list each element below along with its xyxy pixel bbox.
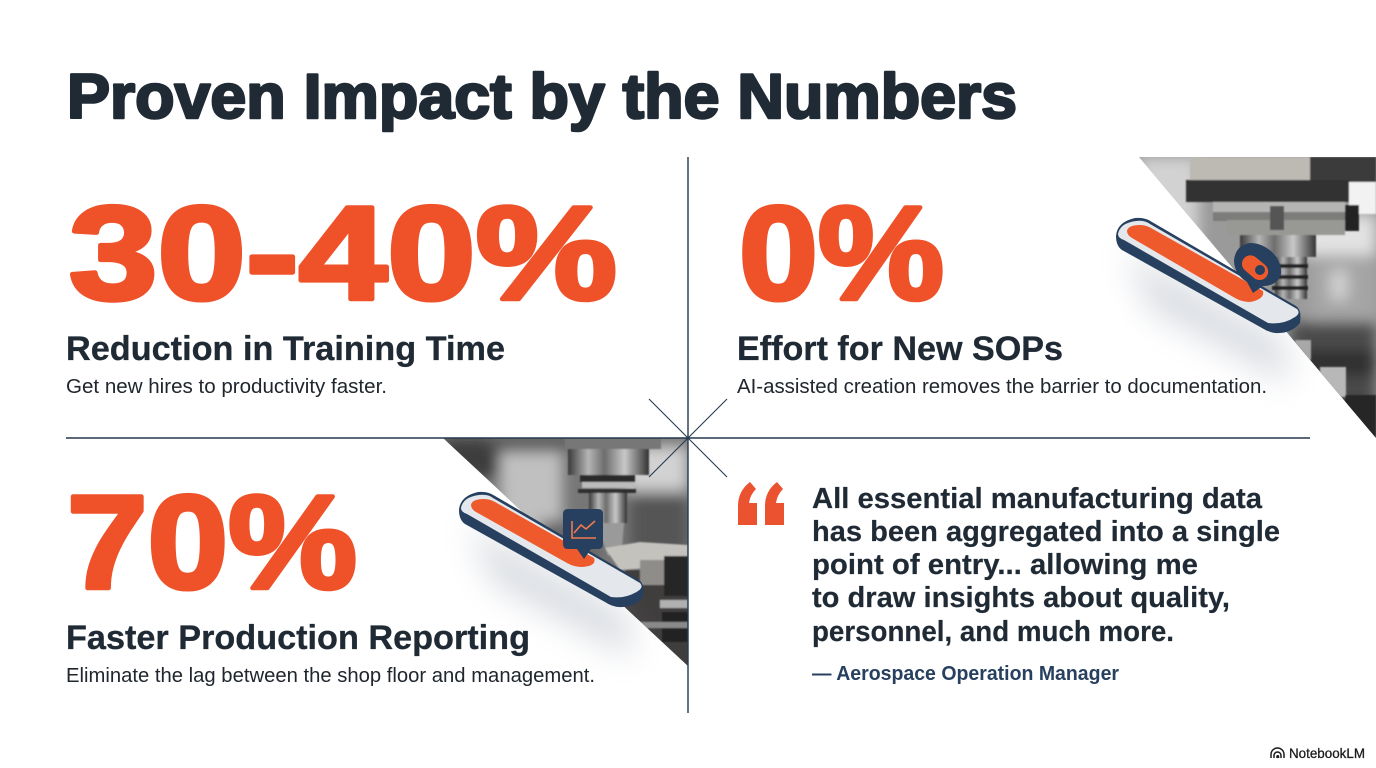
bar shadow, top bbox=[1125, 250, 1290, 385]
icon: slider bar with location pin bbox=[1116, 218, 1300, 333]
stat heading: new SOPs: Effort for New SOPs bbox=[737, 330, 1063, 368]
quote text: point of entry... allowing me bbox=[812, 549, 1198, 581]
photo: milling machine, top right bbox=[1139, 157, 1376, 438]
quote text: All essential manufacturing data bbox=[812, 483, 1263, 515]
logo wordmark: NotebookLM bbox=[1289, 745, 1365, 761]
quote text: personnel, and much more. bbox=[812, 616, 1174, 648]
title: Proven Impact by the Numbers bbox=[67, 62, 1017, 132]
panel: training time stat bbox=[66, 180, 617, 398]
stat description: training time: Get new hires to productivity faster. bbox=[66, 376, 387, 398]
stat number: 0%: 0% bbox=[739, 180, 944, 328]
stat heading: production reporting: Faster Production Reporting bbox=[66, 619, 530, 657]
panel: production reporting stat bbox=[66, 438, 688, 687]
panel: customer quote bbox=[738, 482, 1280, 685]
stat description: production reporting: Eliminate the lag between the shop floor and management. bbox=[66, 665, 595, 687]
panel: new SOPs stat bbox=[737, 157, 1376, 438]
quadrant divider lines bbox=[66, 157, 1310, 713]
stat number: 30-40%: 30-40% bbox=[69, 180, 617, 328]
stat heading: training time: Reduction in Training Time bbox=[66, 330, 505, 368]
icon: NotebookLM mark bbox=[1271, 748, 1284, 758]
quote text bbox=[812, 483, 1280, 648]
icon: slider bar with chart badge bbox=[459, 492, 644, 607]
icon: quotation mark bbox=[738, 482, 784, 525]
stat description: new SOPs: AI-assisted creation removes the barrier to documentation. bbox=[737, 376, 1267, 398]
NotebookLM logo bbox=[1271, 745, 1365, 761]
photo: milling machine, bottom bbox=[443, 438, 688, 666]
quote attribution: — Aerospace Operation Manager bbox=[812, 663, 1119, 685]
quote text: has been aggregated into a single bbox=[812, 516, 1280, 548]
bar shadow, bottom bbox=[468, 524, 633, 659]
stat number: 70%: 70% bbox=[67, 469, 357, 617]
quote text: to draw insights about quality, bbox=[812, 582, 1230, 614]
